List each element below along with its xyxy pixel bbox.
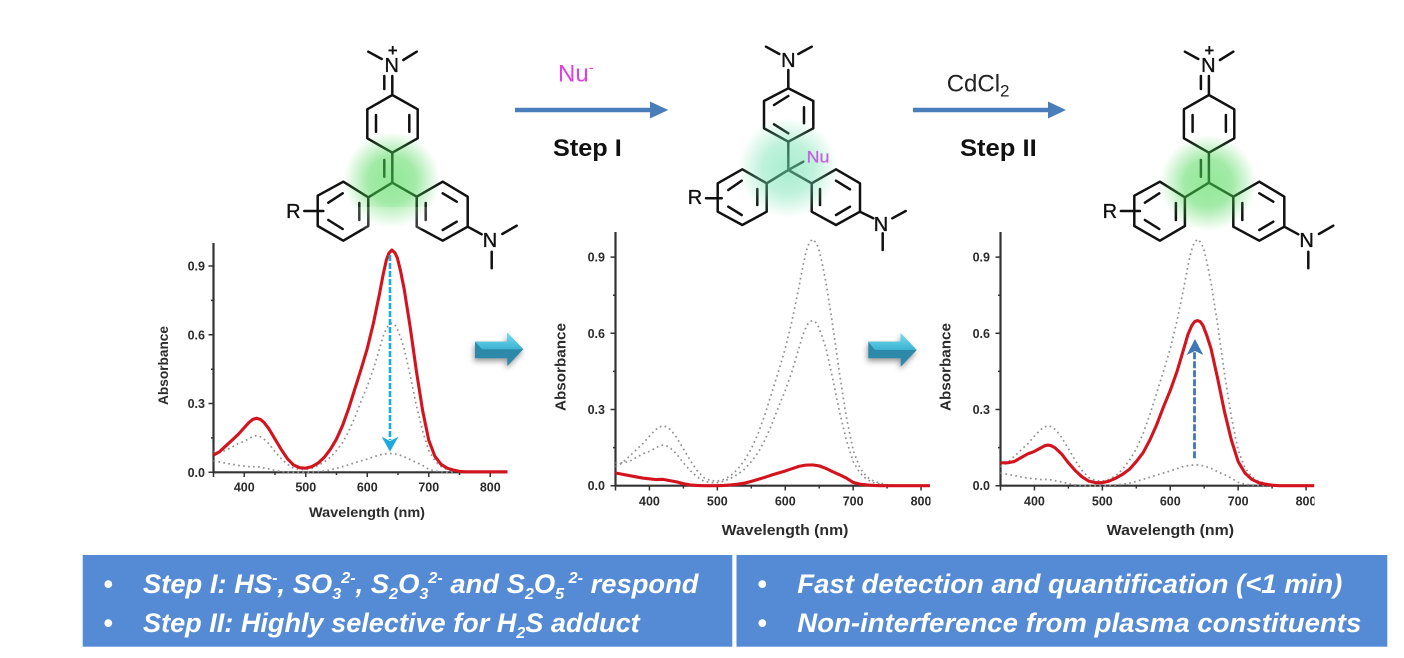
spectra	[1000, 239, 1314, 486]
molecule 1: cationic dye with green glow: N	[483, 230, 497, 252]
x axis title: Wavelength (nm)	[722, 522, 848, 539]
x tick labels: 500	[1092, 494, 1113, 508]
y tick labels: 0.9	[188, 260, 205, 274]
text: step I responses: O	[534, 569, 555, 599]
y tick labels: 0.6	[588, 327, 605, 341]
text: step I responses: 5	[555, 586, 565, 603]
x tick labels: 400	[639, 494, 660, 508]
x tick labels: 800	[1296, 494, 1317, 508]
molecule 3: regenerated cationic dye with green glow: N	[1201, 55, 1216, 77]
text: step I responses: Step I: HS	[143, 569, 270, 599]
x tick labels: 400	[234, 480, 255, 494]
y tick labels: 0.9	[973, 251, 990, 265]
y tick labels: 0.3	[973, 403, 990, 417]
y tick labels: 0.0	[188, 466, 205, 480]
x tick labels	[1024, 494, 1317, 508]
y tick labels: 0.0	[973, 479, 990, 493]
text: step I responses: -	[272, 570, 278, 587]
reaction step I	[515, 60, 668, 162]
molecule 2: Nu adduct with teal glow: N	[874, 214, 888, 236]
x tick labels: 700	[1228, 494, 1249, 508]
label: Step I: Step I	[553, 135, 622, 162]
bullet: step I: •	[103, 569, 113, 599]
y tick labels	[588, 251, 605, 493]
text: step I responses: 2	[524, 586, 534, 603]
arrow: step II	[913, 102, 1066, 118]
text: step I responses: , SO	[276, 569, 332, 599]
x tick labels	[639, 494, 932, 508]
reaction step II	[913, 71, 1066, 162]
molecule 1: cationic dye with green glow: +	[388, 41, 398, 60]
spectra	[616, 239, 930, 486]
chart 3: absorbance after CdCl2	[938, 232, 1328, 539]
molecule 2: Nu adduct with teal glow	[688, 47, 906, 250]
x tick labels: 600	[357, 480, 378, 494]
y tick labels: 0.6	[973, 327, 990, 341]
y tick labels: 0.3	[188, 397, 205, 411]
chart 2: absorbance after nucleophile	[554, 232, 944, 539]
molecule 3: regenerated cationic dye with green glow: N	[1299, 230, 1314, 252]
y axis title: Absorbance	[554, 323, 570, 411]
bullet: step II: •	[103, 608, 113, 638]
molecule 3: regenerated cationic dye with green glow: +	[1204, 41, 1214, 60]
x tick labels: 800	[911, 494, 932, 508]
y tick labels: 0.6	[188, 328, 205, 342]
chart 1: absorbance of initial dye	[156, 243, 507, 520]
text: step I responses: O	[398, 569, 419, 599]
text: step II selectivity: Step II: Highly selective for H	[143, 608, 515, 638]
y tick labels: 0.9	[588, 251, 605, 265]
molecule 2: Nu adduct with teal glow: N	[781, 50, 796, 72]
text: step I responses: , S	[355, 569, 389, 599]
molecule 3: regenerated cationic dye with green glow: R	[1103, 201, 1117, 223]
x tick labels: 500	[707, 494, 728, 508]
x axis title: Wavelength (nm)	[309, 504, 425, 520]
panel: selectivity notes	[83, 555, 732, 647]
text: step I responses: 2	[388, 586, 398, 603]
text: step I responses: 2-	[340, 570, 356, 587]
x tick labels: 600	[775, 494, 796, 508]
spectra	[214, 250, 507, 472]
text: step I responses: 2-	[427, 570, 443, 587]
reagent: Nu-: Nu	[558, 60, 589, 88]
y tick labels: 0.3	[588, 403, 605, 417]
molecule 2: Nu adduct with teal glow: Nu	[807, 149, 829, 167]
x tick labels: 800	[480, 480, 501, 494]
axes and ticks	[610, 232, 930, 490]
axes and ticks	[208, 243, 507, 477]
bullet: non-interference: •	[757, 608, 767, 638]
y tick labels	[973, 251, 990, 493]
y tick labels: 0.0	[588, 479, 605, 493]
text: fast detection: Fast detection and quantification (<1 min)	[797, 569, 1342, 599]
text: step I responses: 3	[332, 586, 341, 603]
arrow: absorbance decrease	[382, 255, 398, 452]
y axis title: Absorbance	[938, 323, 954, 411]
text: step I responses: respond	[583, 569, 699, 599]
x tick labels: 600	[1160, 494, 1181, 508]
x tick labels: 400	[1024, 494, 1045, 508]
molecule 2: Nu adduct with teal glow: R	[688, 187, 702, 209]
molecule 1: cationic dye with green glow	[286, 41, 517, 268]
axes and ticks	[996, 232, 1314, 490]
text: step II selectivity: S adduct	[525, 608, 641, 638]
x tick labels	[234, 480, 501, 494]
x axis title: Wavelength (nm)	[1107, 522, 1234, 539]
text: step I responses: and S	[443, 569, 525, 599]
reagent: CdCl2: CdCl	[947, 71, 1000, 98]
x tick labels: 700	[418, 480, 439, 494]
block arrow between chart 2 and 3	[868, 333, 917, 367]
molecule 1: cationic dye with green glow: R	[286, 201, 301, 223]
x tick labels: 700	[843, 494, 864, 508]
arrow: step I	[515, 102, 668, 118]
text: non-interference: Non-interference from plasma constituents	[797, 608, 1361, 638]
block arrow between chart 1 and 2	[475, 333, 523, 366]
bullet: fast detection: •	[757, 569, 767, 599]
molecule 1: cationic dye with green glow: N	[384, 55, 399, 77]
y tick labels	[188, 260, 205, 480]
reagent: CdCl2: 2	[1000, 82, 1010, 101]
molecule 3: regenerated cationic dye with green glow	[1103, 41, 1333, 268]
text: step I responses: 3	[419, 586, 428, 603]
arrow: absorbance recovery	[1187, 339, 1203, 458]
text: step II selectivity: 2	[515, 625, 525, 642]
reagent: Nu-: -	[589, 60, 594, 76]
x tick labels: 500	[295, 480, 316, 494]
y axis title: Absorbance	[156, 326, 171, 405]
label: Step II: Step II	[960, 135, 1037, 162]
panel: performance notes	[736, 555, 1387, 647]
text: step I responses: 2-	[564, 570, 583, 587]
